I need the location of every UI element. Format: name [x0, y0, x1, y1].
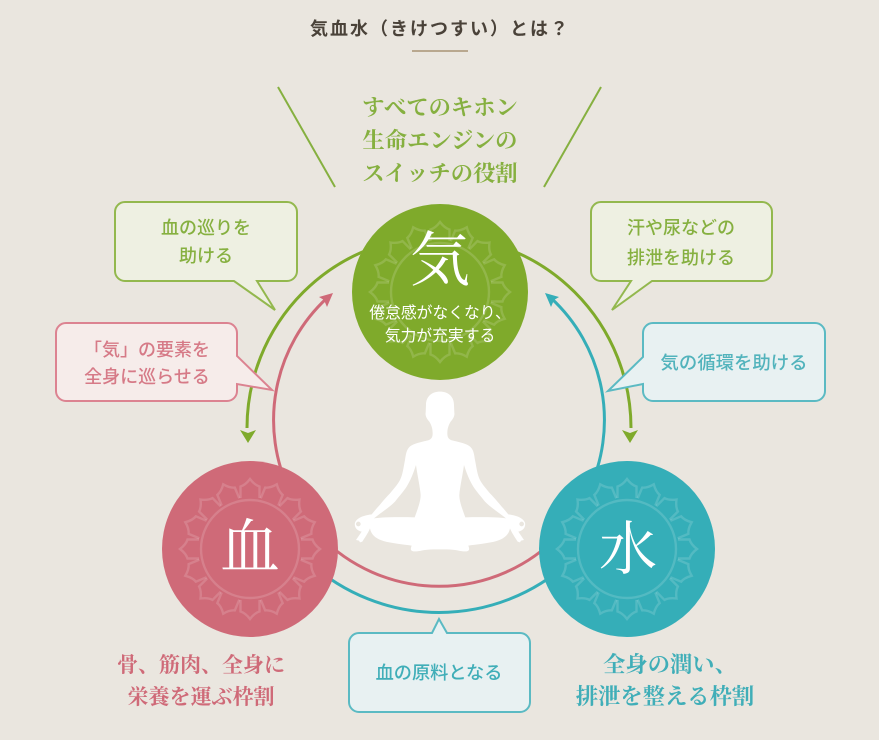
circle: ki: 気力が充実する	[385, 327, 495, 345]
circle: ki	[352, 204, 528, 380]
arrow: pink arc from ketsu to ki	[274, 293, 333, 492]
arrow: green arc from ki to ketsu and sui	[240, 236, 638, 443]
circle: sui	[539, 461, 715, 637]
callout: helps excretion	[591, 202, 772, 310]
left accent line	[278, 87, 335, 187]
caption: sui role: 排泄を整える枠割	[576, 684, 754, 709]
right accent line	[544, 87, 601, 187]
circle: ketsu: 血	[220, 515, 280, 581]
callout: source of blood	[349, 619, 530, 712]
caption: sui role: 全身の潤い、	[603, 652, 737, 677]
callout: source of blood: 血の原料となる	[376, 663, 502, 683]
circle: ketsu	[162, 461, 338, 637]
tagline: ki role	[362, 95, 518, 186]
callout: circulates ki elements: 全身に巡らせる	[84, 367, 210, 387]
callout: helps ki circulation	[608, 323, 825, 401]
tagline: ki role: スイッチの役割	[362, 161, 518, 186]
caption: ketsu role	[117, 653, 285, 709]
callout: circulates ki elements	[56, 323, 272, 401]
arrow: teal arc from sui to ki	[545, 293, 604, 492]
circle: ki: 倦怠感がなくなり、	[369, 304, 511, 322]
callout: helps ki circulation: 気の循環を助ける	[660, 352, 808, 373]
callout: helps blood circulation: 血の巡りを	[161, 218, 251, 238]
title underline	[412, 50, 468, 52]
callout: helps blood circulation	[115, 202, 297, 310]
caption: sui role	[576, 652, 754, 709]
callout: helps excretion: 排泄を助ける	[627, 248, 735, 268]
circle: sui: 水	[599, 517, 657, 582]
figure: meditating silhouette	[355, 392, 525, 551]
caption: ketsu role: 骨、筋肉、全身に	[117, 653, 285, 677]
tagline: ki role: 生命エンジンの	[363, 128, 517, 153]
tagline: ki role: すべてのキホン	[362, 95, 518, 120]
callout: circulates ki elements: 「気」の要素を	[84, 340, 210, 360]
circle: ki: 気	[410, 228, 470, 294]
arc: pink between ketsu and sui	[320, 536, 558, 586]
callout: helps excretion: 汗や尿などの	[627, 218, 735, 238]
arc: teal between ketsu and sui	[310, 563, 568, 612]
title: 気血水（きけつすい）とは？	[310, 18, 570, 39]
caption: ketsu role: 栄養を運ぶ枠割	[128, 685, 274, 709]
callout: helps blood circulation: 助ける	[179, 246, 233, 266]
